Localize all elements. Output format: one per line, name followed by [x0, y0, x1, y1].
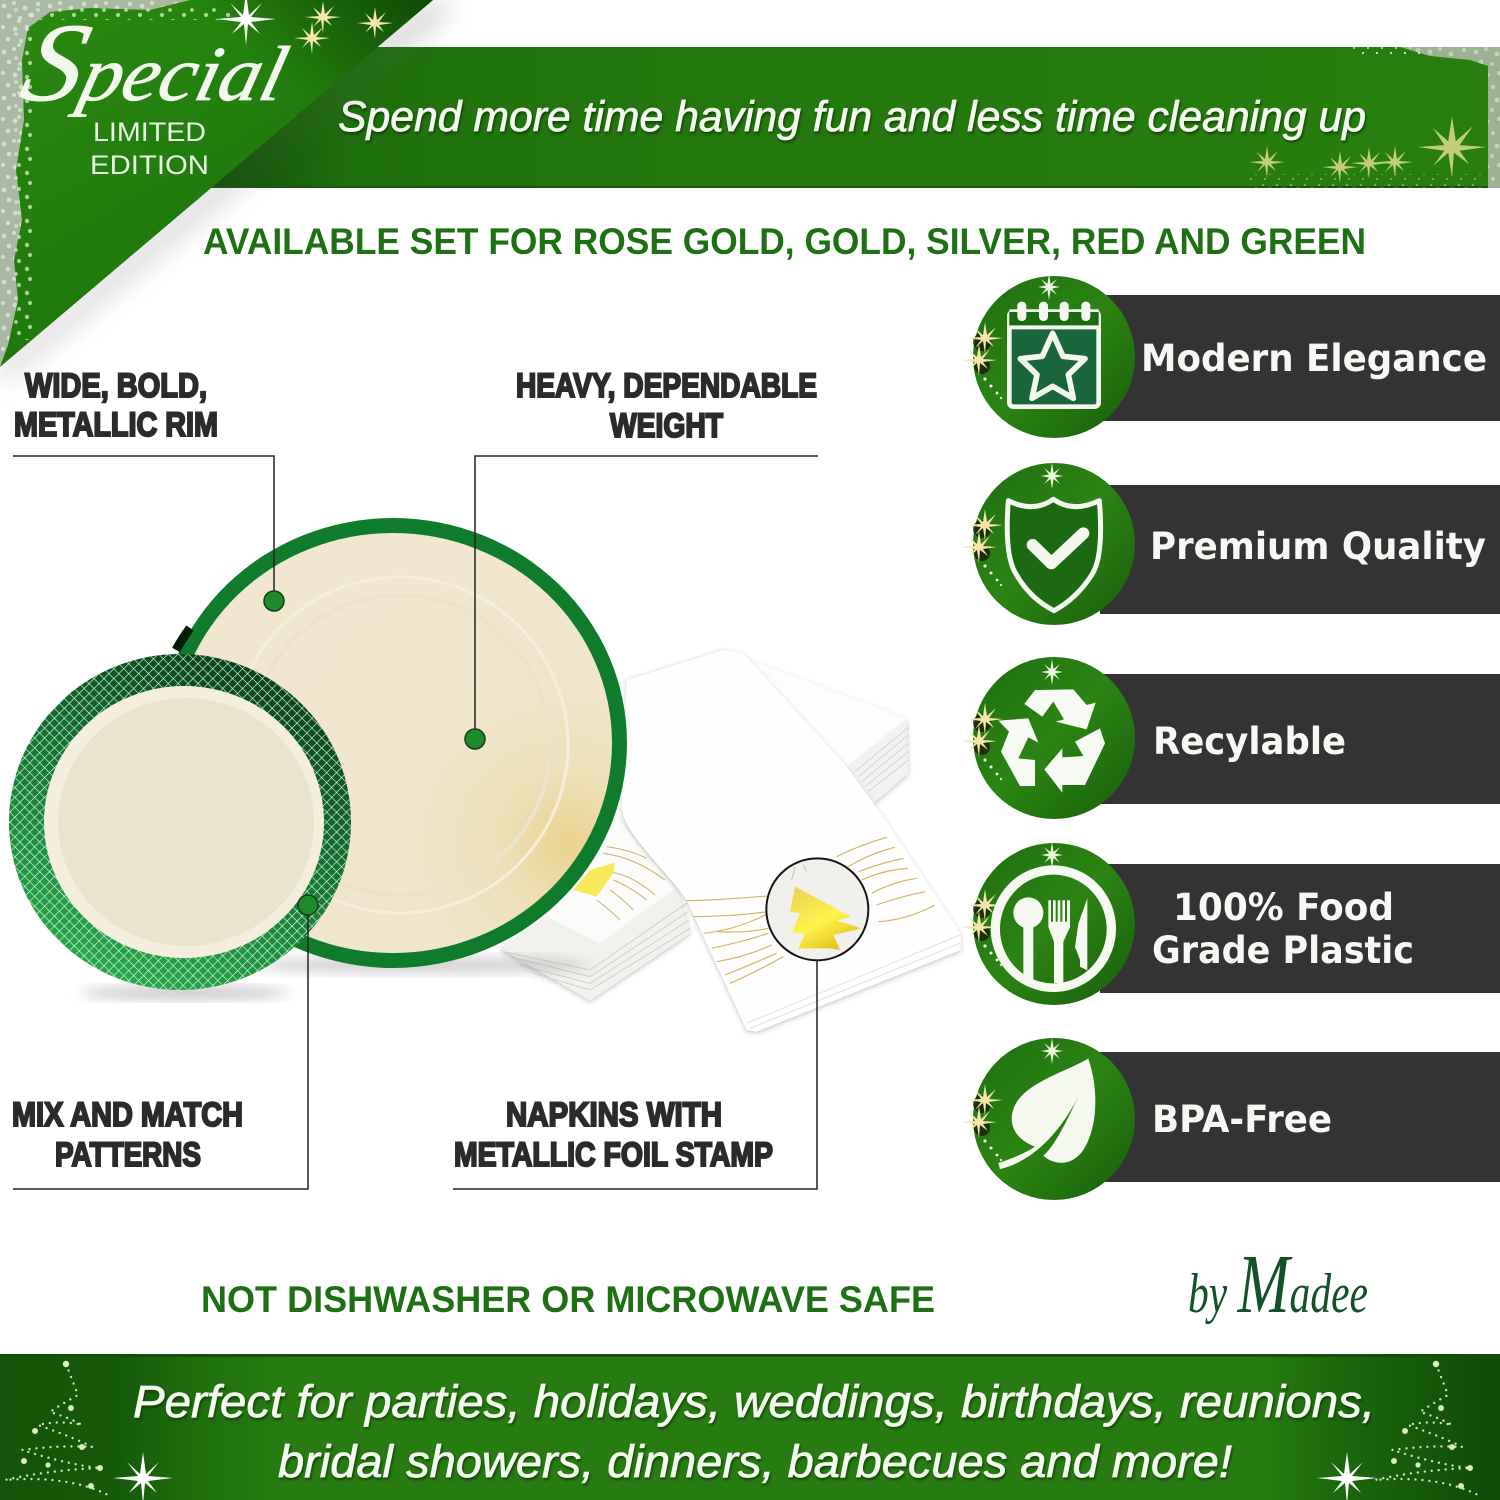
- warning heading: NOT DISHWASHER OR MICROWAVE SAFE: [201, 1279, 935, 1320]
- feature: food grade: [961, 842, 1500, 1005]
- feature: recyclable: [961, 657, 1500, 819]
- feature: premium quality: [961, 463, 1500, 625]
- callout label: patterns: PATTERNS: [55, 1136, 201, 1174]
- brand signature: by Madee: [1188, 1238, 1368, 1331]
- left napkin foil pattern: [573, 847, 665, 920]
- corner ribbon: special limited edition: EDITION: [90, 150, 209, 180]
- left christmas tree: [5, 1361, 110, 1496]
- bottom tagline: Perfect for parties, holidays, weddings, birthdays, reunions,: [133, 1376, 1375, 1427]
- callout label: patterns: MIX AND MATCH: [12, 1096, 243, 1134]
- callout leader: patterns: [13, 895, 318, 1189]
- large plate: [159, 518, 627, 973]
- bottom banner: bridal showers, dinners, barbecues and more!: [278, 1436, 1233, 1487]
- badge: [973, 1038, 1135, 1200]
- callout label: napkins: NAPKINS WITH: [506, 1096, 722, 1134]
- icon: calendar star: [1009, 302, 1099, 407]
- feature: bpa free: [961, 1038, 1500, 1200]
- special script: Special: [11, 1, 304, 125]
- callout label: napkins: METALLIC FOIL STAMP: [454, 1136, 773, 1174]
- feature: modern elegance: [961, 274, 1500, 438]
- banner tagline: Spend more time having fun and less time cleaning up: [338, 93, 1366, 141]
- label: Modern Elegance: [1141, 337, 1487, 380]
- callout label: napkins: [454, 1096, 773, 1174]
- bottom banner: [0, 1354, 1500, 1500]
- callout leader: foil stamp: [453, 960, 817, 1189]
- front napkin: [622, 650, 961, 1032]
- callout label: weight: [516, 367, 817, 445]
- badge: [973, 276, 1135, 438]
- callout label: weight: WEIGHT: [610, 407, 723, 445]
- heading: available set: AVAILABLE SET FOR ROSE GOLD, GOLD, SILVER, RED AND GREEN: [203, 221, 1366, 262]
- icon: shield check: [1007, 499, 1101, 611]
- label: [1152, 886, 1414, 972]
- limited edition: LIMITED: [93, 117, 206, 147]
- label: BPA-Free: [1152, 1098, 1332, 1141]
- icon: plate and cutlery: [991, 865, 1116, 992]
- badge: [973, 843, 1135, 1005]
- callout leader: weight: [465, 456, 818, 749]
- left napkin stack: [500, 817, 690, 1001]
- badge: [973, 463, 1135, 625]
- label: Grade Plastic: [1152, 929, 1414, 972]
- callout label: rim: WIDE, BOLD,: [25, 367, 207, 405]
- right christmas tree: [1375, 1361, 1480, 1496]
- icon: leaf: [998, 1059, 1095, 1169]
- callout leader: rim: [13, 456, 284, 611]
- back napkin stack: [627, 650, 908, 840]
- callout label: rim: METALLIC RIM: [14, 406, 218, 444]
- badge: [973, 657, 1135, 819]
- label: Recylable: [1153, 720, 1346, 763]
- label: Premium Quality: [1150, 525, 1486, 568]
- foil stamp magnifier: [766, 858, 868, 960]
- front napkin foil lines: [687, 837, 935, 983]
- label: 100% Food: [1173, 886, 1394, 929]
- napkins: [500, 650, 961, 1032]
- callout label: patterns: [12, 1096, 243, 1174]
- callout label: rim: [14, 367, 218, 444]
- top banner: [190, 47, 1500, 188]
- icon: recycling arrows: [998, 689, 1105, 793]
- callout label: weight: HEAVY, DEPENDABLE: [516, 367, 817, 405]
- small plate: [9, 654, 351, 999]
- corner ribbon: special limited edition: [0, 0, 450, 382]
